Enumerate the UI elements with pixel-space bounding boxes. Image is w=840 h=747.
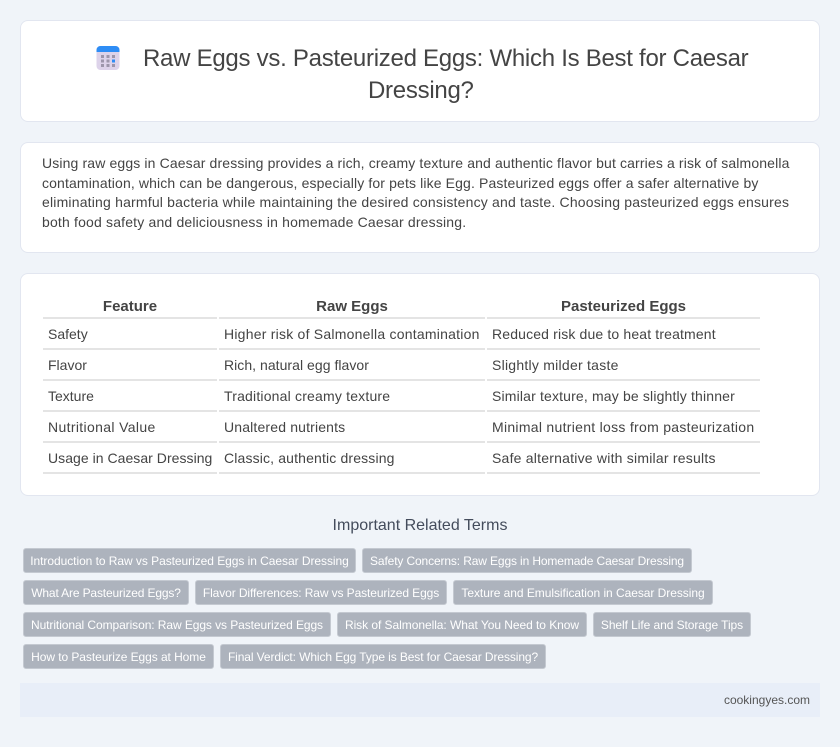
related term tags: How to Pasteurize Eggs at Home xyxy=(31,650,206,664)
related term tags: Final Verdict: Which Egg Type is Best for Caesar Dressing? xyxy=(228,650,538,664)
table row: usage: Safe alternative with similar results xyxy=(492,450,716,466)
table row: nutritional value xyxy=(48,419,754,435)
related term tags: Flavor Differences: Raw vs Pasteurized Eggs xyxy=(203,586,439,600)
intro text: both food safety and deliciousness in homemade Caesar dressing. xyxy=(42,214,466,230)
table header row: Raw Eggs xyxy=(316,298,388,315)
table row: usage: Usage in Caesar Dressing xyxy=(48,450,212,466)
table row: texture: Similar texture, may be slightly thinner xyxy=(492,388,735,404)
footer credit: cookingyes.com xyxy=(724,693,810,707)
table row: texture: Texture xyxy=(48,388,94,404)
related term tags: Risk of Salmonella: What You Need to Know xyxy=(345,618,579,632)
intro text: Using raw eggs in Caesar dressing provides a rich, creamy texture and authentic flavor but carries a risk of salmonella xyxy=(42,155,790,171)
table row: nutritional value: Minimal nutrient loss from pasteurization xyxy=(492,419,754,435)
panel: intro xyxy=(20,142,820,253)
table row: flavor: Rich, natural egg flavor xyxy=(224,357,369,373)
related term tags: Nutritional Comparison: Raw Eggs vs Pasteurized Eggs xyxy=(31,618,323,632)
intro text: eliminating harmful bacteria while maintaining the desired consistency and taste. Choosing pasteurized eggs ensures xyxy=(42,194,789,210)
table row: safety: Reduced risk due to heat treatment xyxy=(492,326,716,342)
table row: texture xyxy=(48,388,735,404)
table row: usage xyxy=(48,450,716,466)
table row: safety: Safety xyxy=(48,326,88,342)
table row: safety: Higher risk of Salmonella contamination xyxy=(224,326,480,342)
related term tags: What Are Pasteurized Eggs? xyxy=(31,586,181,600)
intro text xyxy=(42,155,790,230)
related term tags: Shelf Life and Storage Tips xyxy=(601,618,743,632)
related terms heading: Important Related Terms xyxy=(333,517,507,534)
title xyxy=(143,45,748,104)
title: Raw Eggs vs. Pasteurized Eggs: Which Is Best for Caesar xyxy=(143,45,748,72)
related term tags: Texture and Emulsification in Caesar Dressing xyxy=(461,586,705,600)
table header row: Pasteurized Eggs xyxy=(561,298,686,315)
related term tags: Safety Concerns: Raw Eggs in Homemade Caesar Dressing xyxy=(370,554,684,568)
table row: texture: Traditional creamy texture xyxy=(224,388,390,404)
table row: safety xyxy=(48,326,716,342)
related term tags: Introduction to Raw vs Pasteurized Eggs in Caesar Dressing xyxy=(30,554,349,568)
panel: header xyxy=(20,20,820,122)
intro text: contamination, which can be dangerous, especially for pets like Egg. Pasteurized eggs offer a safer alternative by xyxy=(42,175,759,191)
table row: flavor xyxy=(48,357,619,373)
icon: calendar xyxy=(96,46,120,70)
table header row: Feature xyxy=(103,298,157,315)
table row: flavor: Flavor xyxy=(48,357,87,373)
related term tags xyxy=(23,548,751,669)
table row: nutritional value: Nutritional Value xyxy=(48,419,156,435)
footer xyxy=(20,683,820,717)
panel: comparison table xyxy=(20,273,820,496)
table row: usage: Classic, authentic dressing xyxy=(224,450,395,466)
table header row xyxy=(103,298,686,315)
title: Dressing? xyxy=(368,77,474,104)
table row: nutritional value: Unaltered nutrients xyxy=(224,419,345,435)
table row: flavor: Slightly milder taste xyxy=(492,357,619,373)
